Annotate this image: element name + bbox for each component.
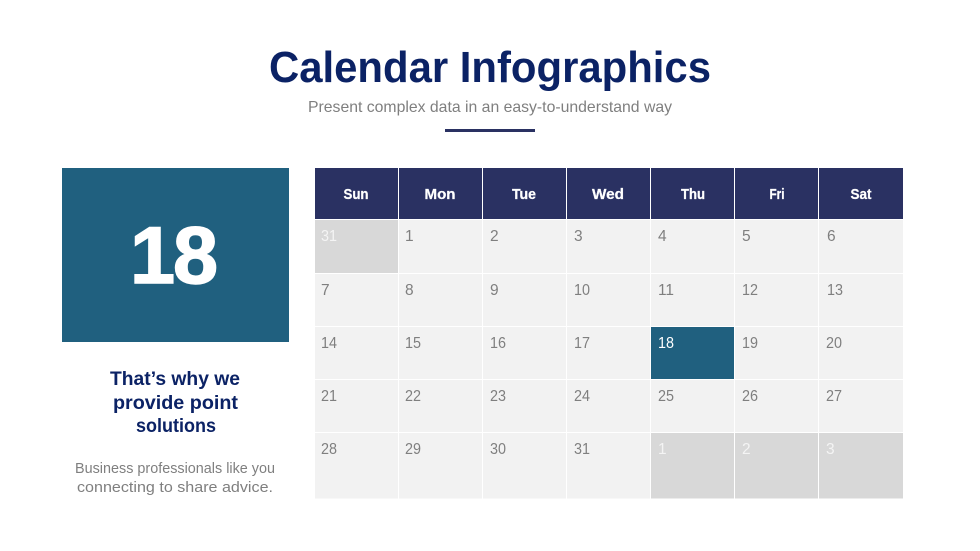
calendar week 1: 6 [827, 228, 836, 245]
description text: connecting to share advice. [77, 479, 273, 496]
calendar header row: Mon [424, 187, 456, 203]
heading: point solutions: That’s why we [110, 369, 240, 390]
calendar week 1: 3 [574, 228, 583, 245]
calendar week 5: 30 [490, 441, 506, 458]
calendar week 4: 26 [742, 388, 758, 405]
panel: highlighted date [62, 168, 289, 342]
calendar week 5: 28 [321, 441, 337, 458]
calendar week 2: 9 [490, 282, 499, 299]
calendar week 3: 17 [574, 335, 590, 352]
calendar week 1: 1 [405, 228, 414, 245]
calendar week 2: 10 [574, 282, 590, 299]
calendar week 3: 18 [658, 335, 674, 352]
calendar week 5: 2 [742, 441, 751, 458]
calendar week 5: 31 [574, 441, 590, 458]
calendar week 4: 22 [405, 388, 421, 405]
subtitle: Present complex data in an easy-to-understand way [308, 99, 672, 116]
calendar week 1: 31 [321, 228, 337, 245]
calendar [315, 168, 903, 498]
calendar week 2 [315, 274, 903, 326]
calendar week 2: 11 [658, 282, 674, 299]
calendar week 3: 15 [405, 335, 421, 352]
calendar week 2: 13 [827, 282, 843, 299]
calendar header row [315, 168, 903, 219]
calendar week 1: 5 [742, 228, 751, 245]
title underline [445, 129, 535, 132]
description text: Business professionals like you [75, 460, 275, 477]
calendar week 4: 23 [490, 388, 506, 405]
calendar week 3: 16 [490, 335, 506, 352]
calendar week 5: 1 [658, 441, 667, 458]
calendar week 4 [315, 380, 903, 432]
calendar week 5: 29 [405, 441, 421, 458]
calendar week 5 [315, 433, 903, 498]
calendar week 4: 27 [826, 388, 842, 405]
calendar week 4: 25 [658, 388, 674, 405]
heading: point solutions: solutions [136, 416, 216, 437]
calendar week 1 [315, 220, 903, 273]
big date number: 18 [130, 211, 218, 301]
description text [75, 460, 275, 496]
calendar week 2: 8 [405, 282, 414, 299]
calendar header row: Thu [681, 187, 705, 203]
calendar week 4: 24 [574, 388, 590, 405]
calendar week 3 [315, 327, 903, 379]
calendar week 3: 19 [742, 335, 758, 352]
heading: point solutions: provide point [113, 393, 239, 414]
calendar week 2: 7 [321, 282, 330, 299]
calendar header row: Wed [592, 187, 624, 203]
calendar week 1: 4 [658, 228, 667, 245]
calendar header row: Sun [344, 187, 368, 203]
calendar week 2: 12 [742, 282, 758, 299]
calendar week 1: 2 [490, 228, 499, 245]
title: Calendar Infographics [269, 43, 711, 92]
calendar header row: Fri [770, 187, 784, 203]
calendar week 5: 3 [826, 441, 835, 458]
calendar header row: Tue [512, 187, 536, 203]
calendar week 3: 20 [826, 335, 842, 352]
calendar week 3: 14 [321, 335, 337, 352]
calendar week 4: 21 [321, 388, 337, 405]
calendar header row: Sat [850, 187, 872, 203]
heading: point solutions [110, 369, 240, 437]
